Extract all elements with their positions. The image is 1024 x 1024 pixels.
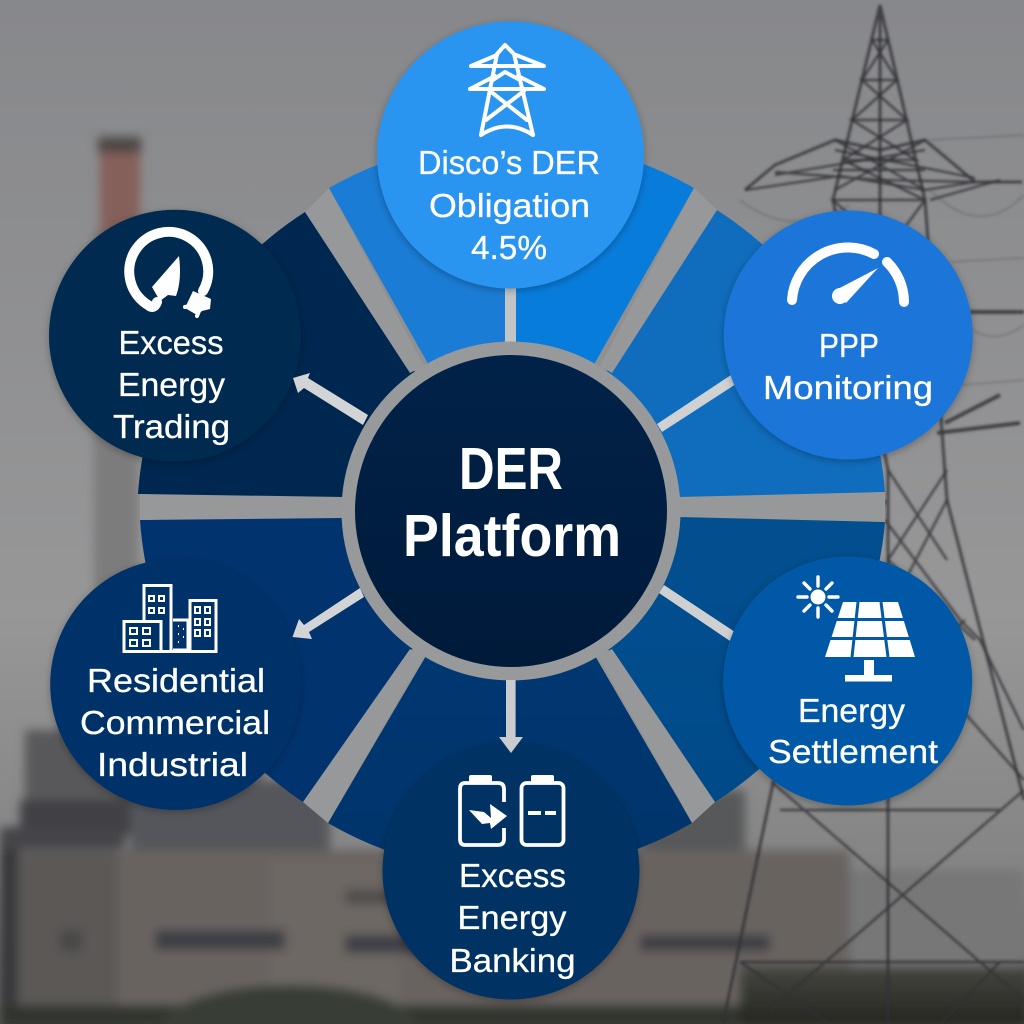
- node: PPP Monitoring: [724, 210, 973, 460]
- node: Energy Settlement: Energy: [798, 693, 905, 730]
- icon: transmission tower: [470, 45, 544, 135]
- node: Disco's DER Obligation: [377, 22, 644, 288]
- node: Disco's DER Obligation: Obligation: [429, 188, 590, 225]
- node: Excess Energy Trading: Excess: [118, 325, 224, 362]
- connector: top: [505, 285, 516, 343]
- node: Residential Commercial Industrial: Commercial: [80, 705, 270, 742]
- node: Energy Settlement: [723, 556, 972, 806]
- node: Disco's DER Obligation: Disco’s DER: [418, 145, 600, 182]
- node: PPP Monitoring: PPP: [819, 328, 879, 365]
- panel: top wedge, obligation: [329, 139, 694, 511]
- node: Excess Energy Banking: [382, 742, 640, 1000]
- node: Excess Energy Banking: Excess: [459, 858, 566, 895]
- node: Residential Commercial Industrial: Residential: [87, 663, 265, 700]
- node: Excess Energy Trading: [49, 210, 301, 462]
- node: Residential Commercial Industrial: [50, 559, 301, 810]
- icon: plug cable loop with leaf: [129, 232, 211, 316]
- panel: upper left wedge, trading: [138, 212, 511, 511]
- arrow: to trading: [293, 373, 368, 425]
- node: Excess Energy Banking: Banking: [450, 943, 576, 980]
- icon: gauge: [792, 248, 904, 304]
- node: Excess Energy Banking: Energy: [458, 900, 567, 937]
- node: Excess Energy Trading: Trading: [113, 409, 230, 446]
- arrow: to customers: [292, 588, 364, 639]
- center hub: DER Platform: [342, 342, 680, 680]
- node: Residential Commercial Industrial: Industrial: [97, 747, 248, 784]
- panel: lower left wedge, customers: [140, 511, 511, 802]
- icon: city buildings: [124, 586, 216, 652]
- arrow: down to banking: [499, 680, 523, 753]
- node: Excess Energy Trading: Energy: [118, 367, 225, 404]
- icon: sun: [798, 577, 838, 617]
- gray spokes between wedges: [140, 188, 885, 823]
- node: Disco's DER Obligation: 4.5%: [471, 230, 547, 267]
- center hub: DER Platform: DER: [459, 436, 563, 502]
- connector: upper right: [657, 375, 736, 432]
- center hub: DER Platform: Platform: [403, 503, 621, 569]
- panel: bottom wedge, banking: [328, 511, 692, 872]
- icon: solar panel: [825, 602, 915, 682]
- icon: batteries with transfer arrow: [460, 775, 564, 845]
- panel: upper right wedge, monitoring: [511, 210, 885, 511]
- panel: lower right wedge, settlement: [511, 511, 885, 802]
- node: PPP Monitoring: Monitoring: [763, 370, 933, 407]
- connector: lower right: [659, 585, 735, 641]
- node: Energy Settlement: Settlement: [768, 734, 939, 771]
